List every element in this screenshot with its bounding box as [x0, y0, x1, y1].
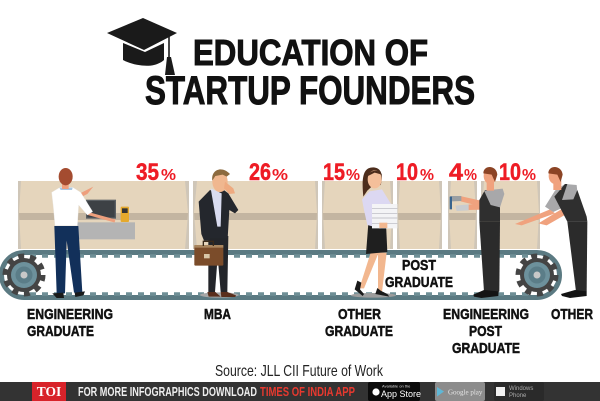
windows phone badge: Windows — [509, 386, 533, 392]
icon: left gear — [5, 256, 43, 294]
category labels: POST — [402, 257, 436, 274]
percentages: % — [522, 167, 536, 184]
category labels — [27, 257, 593, 357]
figure: engineering graduate at desk — [52, 168, 135, 298]
percentages: % — [420, 167, 434, 184]
google play badge: Google play — [448, 388, 483, 396]
icon: right gear — [518, 256, 556, 294]
category labels: POST — [469, 323, 502, 340]
source note: Source: JLL CII Future of Work — [215, 363, 384, 380]
percentages: 10 — [396, 159, 418, 186]
TOI logo — [32, 382, 66, 401]
footer bar: FOR MORE INFOGRAPHICS DOWNLOAD — [78, 385, 257, 399]
percentages: 26 — [249, 159, 271, 186]
percentages: % — [464, 167, 477, 184]
category labels: GRADUATE — [452, 340, 520, 357]
category labels: MBA — [204, 306, 231, 323]
percentages: 15 — [323, 159, 345, 186]
title — [145, 32, 475, 113]
title: STARTUP FOUNDERS — [145, 69, 475, 113]
google play badge — [435, 382, 485, 401]
app store badge: Available on the — [382, 384, 411, 388]
percentages — [136, 159, 536, 186]
figure: engineering post graduate worker — [450, 167, 504, 298]
app store badge: App Store — [381, 389, 421, 399]
percentages: % — [346, 167, 360, 184]
panel: cardboard boxes — [18, 181, 540, 249]
TOI logo: TOI — [37, 384, 61, 399]
percentages: % — [272, 167, 288, 184]
category labels: GRADUATE — [27, 323, 94, 340]
title: EDUCATION OF — [193, 32, 428, 73]
category labels: GRADUATE — [325, 323, 393, 340]
figure: MBA businessman — [194, 169, 239, 298]
figure: other worker — [515, 167, 587, 298]
footer bar — [0, 382, 600, 401]
category labels: OTHER — [338, 306, 381, 323]
figure: other graduate woman with papers — [351, 167, 397, 298]
category labels: GRADUATE — [385, 274, 453, 291]
percentages: % — [161, 167, 176, 184]
conveyor belt — [2, 252, 560, 298]
app store badge — [368, 382, 421, 401]
percentages: 4 — [449, 159, 464, 186]
footer bar: TIMES OF INDIA APP — [260, 385, 355, 399]
icon: graduation cap — [107, 18, 177, 75]
percentages: 10 — [499, 159, 521, 186]
percentages: 35 — [136, 159, 159, 186]
windows phone badge — [494, 382, 544, 401]
windows phone badge: Phone — [509, 393, 527, 399]
category labels: ENGINEERING — [443, 306, 529, 323]
category labels: ENGINEERING — [27, 306, 113, 323]
